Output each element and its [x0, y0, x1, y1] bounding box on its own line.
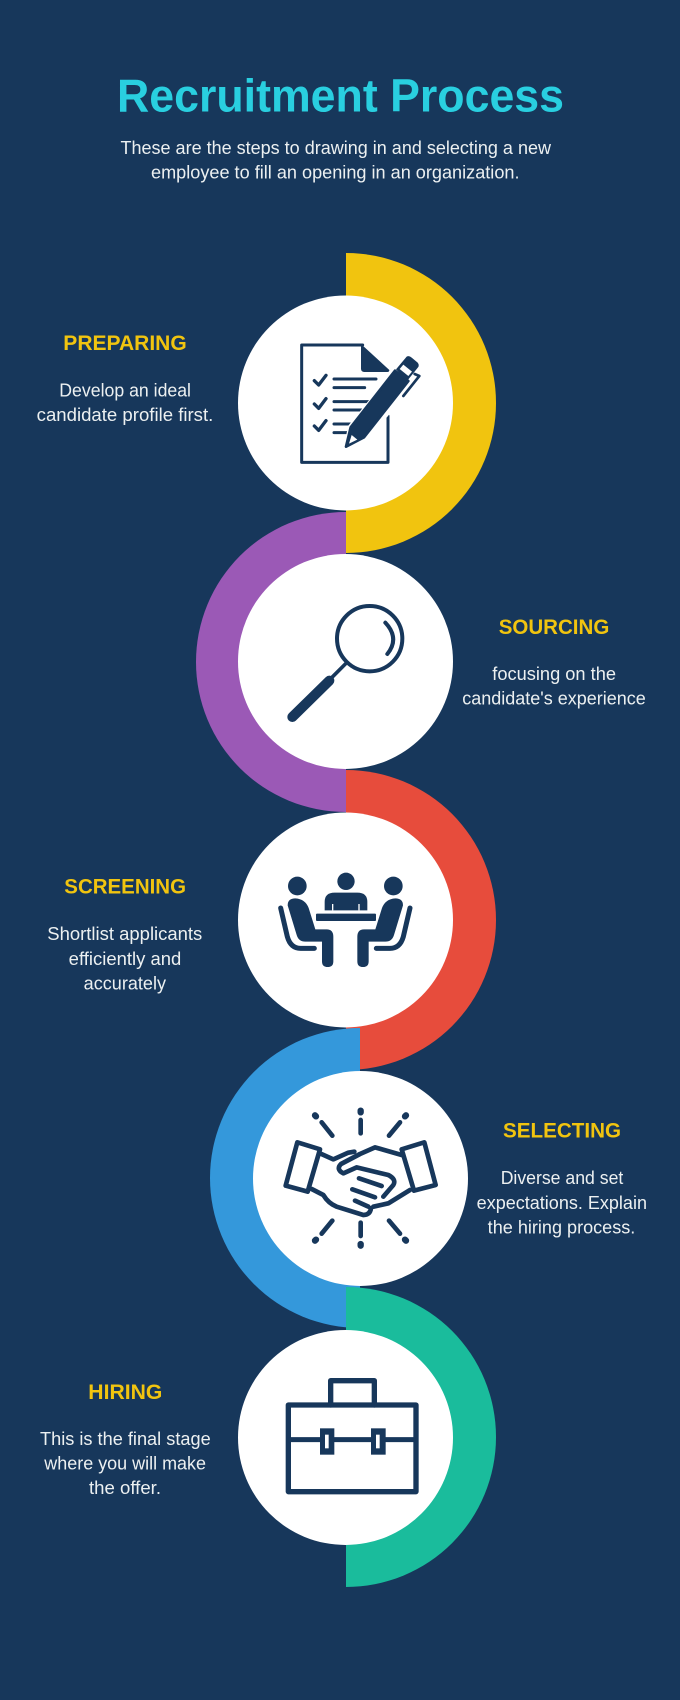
heading: selecting: SELECTING — [503, 1119, 621, 1143]
subtitle text: employee to fill an opening in an organization. — [151, 162, 520, 182]
white circle — [238, 812, 453, 1028]
text: hiring description: This is the final stage — [40, 1429, 211, 1449]
text: preparing description: candidate profile first. — [37, 405, 213, 425]
text: screening description: Shortlist applicants — [47, 924, 202, 944]
panel: preparing step — [37, 253, 496, 553]
red half circle — [346, 770, 496, 1070]
text: screening description: accurately — [84, 973, 166, 993]
yellow half circle — [346, 253, 496, 553]
text: hiring description: where you will make — [43, 1453, 206, 1473]
white circle — [238, 554, 453, 769]
icon: handshake — [286, 1111, 436, 1246]
subtitle text: These are the steps to drawing in and selecting a new — [120, 138, 552, 158]
white circle — [238, 1330, 453, 1545]
panel: hiring step — [40, 1287, 496, 1587]
heading: screening: SCREENING — [64, 874, 186, 898]
icon: meeting at table — [281, 873, 410, 967]
purple half circle — [196, 512, 346, 812]
heading: preparing: PREPARING — [63, 331, 187, 355]
icon: document and pen — [302, 344, 419, 462]
text: sourcing description — [462, 664, 646, 708]
heading: hiring: HIRING — [88, 1380, 162, 1404]
heading: sourcing: SOURCING — [499, 615, 609, 639]
white circle — [238, 296, 453, 510]
white circle — [253, 1071, 468, 1286]
title: Recruitment Process — [117, 70, 564, 122]
panel: screening step — [47, 770, 496, 1070]
icon: magnifying glass — [292, 606, 402, 717]
green half circle — [346, 1287, 496, 1587]
text: selecting description — [477, 1168, 647, 1238]
text: preparing description — [37, 380, 213, 425]
text: hiring description — [40, 1429, 211, 1498]
text: screening description — [47, 924, 202, 993]
text: sourcing description: focusing on the — [492, 664, 616, 684]
subtitle text — [120, 138, 552, 182]
text: screening description: efficiently and — [69, 949, 181, 969]
blue half circle — [210, 1028, 360, 1328]
panel: sourcing step — [196, 512, 646, 812]
text: preparing description: Develop an ideal — [59, 380, 191, 400]
text: selecting description: expectations. Explain — [477, 1193, 647, 1213]
text: hiring description: the offer. — [89, 1478, 161, 1498]
text: selecting description: the hiring process. — [488, 1218, 635, 1238]
text: sourcing description: candidate's experience — [462, 688, 646, 708]
text: selecting description: Diverse and set — [501, 1168, 623, 1188]
icon: briefcase — [288, 1381, 416, 1492]
panel: selecting step — [210, 1028, 647, 1328]
